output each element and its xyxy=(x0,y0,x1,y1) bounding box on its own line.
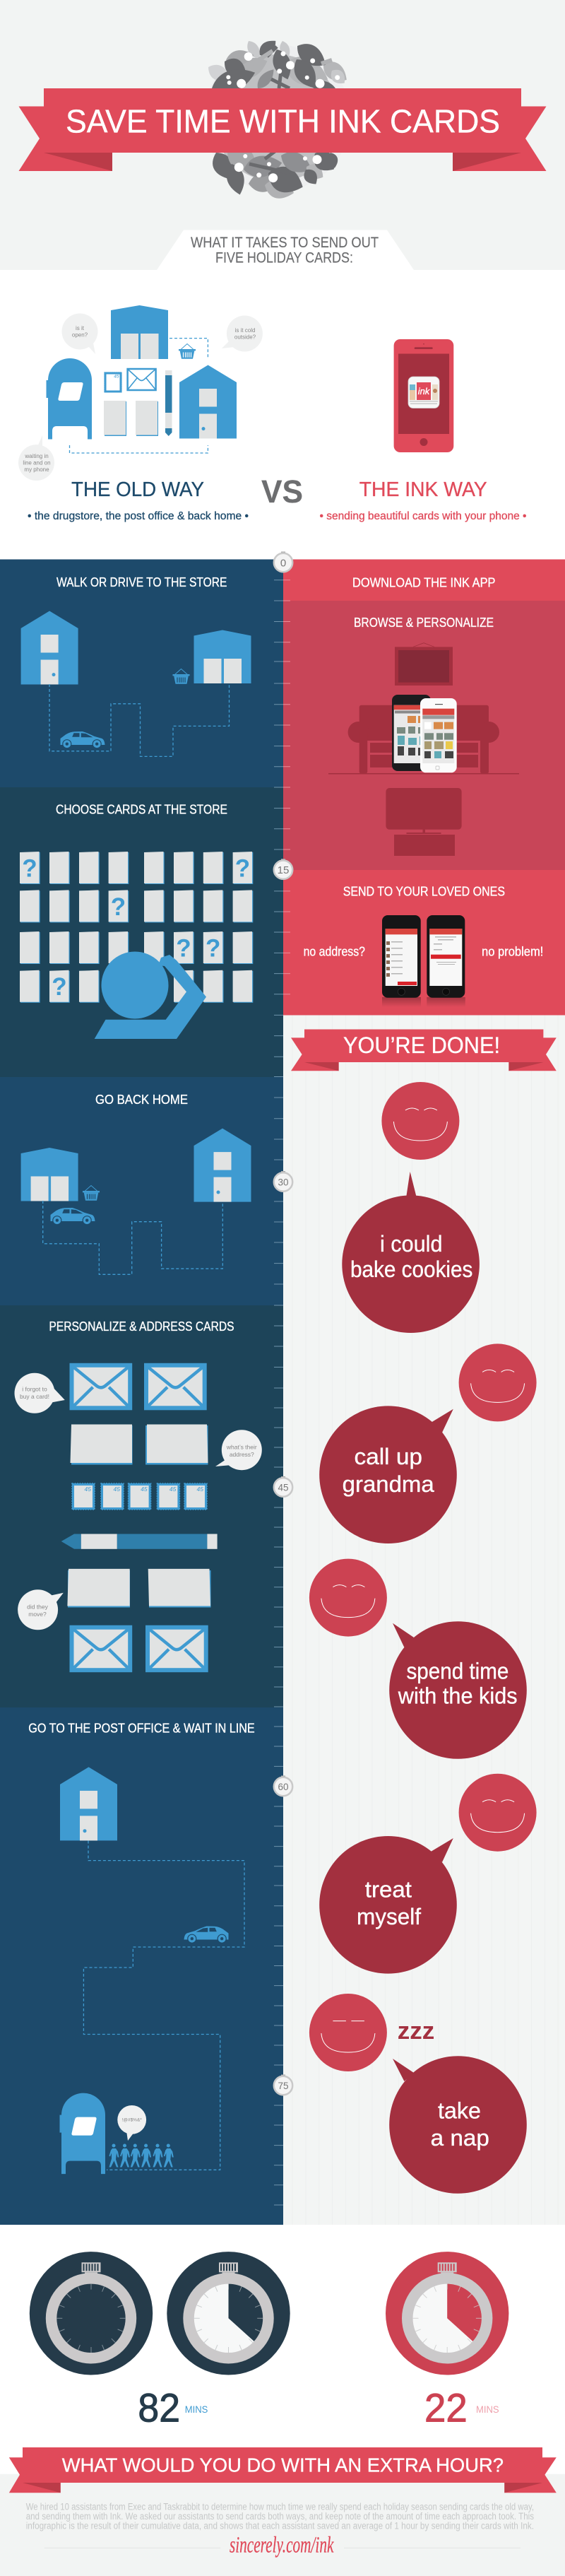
bubble: address: address? xyxy=(230,1451,254,1458)
picture frame xyxy=(395,643,453,686)
pencil xyxy=(165,370,172,436)
bubble: address xyxy=(215,1430,262,1470)
VS: VS xyxy=(261,474,303,510)
bubble: is it cold: outside? xyxy=(234,334,256,341)
timer: 75: 75 xyxy=(278,2081,289,2091)
footer url: sincerely.com/ink xyxy=(230,2533,334,2558)
heading: the old way: • the drugstore, the post office & back home • xyxy=(28,510,249,522)
stopwatch: 22 minutes dark xyxy=(167,2252,290,2375)
bubble: waiting in line: waiting in xyxy=(24,453,49,459)
old way illustration xyxy=(18,305,263,481)
bubble: waiting in line: line and on xyxy=(23,459,51,466)
extra hour ribbon: WHAT WOULD YOU DO WITH AN EXTRA HOUR? xyxy=(62,2454,504,2476)
tv xyxy=(386,788,462,856)
people queue xyxy=(109,2144,174,2167)
face and bubble: bake cookies xyxy=(342,1082,480,1333)
bubble: forgot xyxy=(14,1373,65,1413)
timer: 15: 15 xyxy=(278,864,289,876)
stopwatch: 22 minutes red xyxy=(386,2252,509,2375)
title: SAVE TIME WITH INK CARDS xyxy=(66,103,500,140)
face and bubble: take a nap: zzz xyxy=(398,2018,434,2045)
page background: top band xyxy=(0,0,565,270)
face and bubble: take a nap xyxy=(309,1994,527,2194)
face and bubble: call up grandma: call up xyxy=(355,1444,422,1469)
timer: 45 xyxy=(274,1476,292,1497)
white iphone screenshot xyxy=(420,698,457,772)
envelopes top xyxy=(69,1363,207,1410)
sofa xyxy=(328,705,519,775)
panel: go back home xyxy=(0,1077,283,1305)
face and bubble: take a nap: take xyxy=(438,2098,481,2123)
you're done ribbon xyxy=(291,1029,557,1071)
bubble: moved xyxy=(18,1589,64,1630)
envelope xyxy=(128,369,156,390)
number: 22 mins: MINS xyxy=(476,2404,499,2415)
title ribbon xyxy=(18,88,547,171)
panel: personalize and address cards xyxy=(0,1305,283,1707)
face and bubble: bake cookies: bake cookies xyxy=(350,1257,472,1282)
bubble: forgot: i forgot to xyxy=(22,1385,47,1392)
face and bubble: bake cookies: i could xyxy=(380,1231,442,1257)
timer: 15 xyxy=(274,859,292,879)
stamp: 45 xyxy=(114,375,119,379)
card grid: ? xyxy=(176,934,191,963)
heading: the old way: THE OLD WAY xyxy=(71,478,204,501)
face and bubble: treat myself xyxy=(319,1774,537,1974)
card grid xyxy=(20,852,253,1003)
heading: the old way xyxy=(28,478,249,522)
ink app icon xyxy=(408,377,439,408)
face and bubble: call up grandma: grandma xyxy=(343,1471,434,1497)
face and bubble: spend time with the kids: with the kids xyxy=(398,1683,518,1709)
number: 22 mins: 22 xyxy=(424,2386,468,2431)
panel: walk or drive to the store xyxy=(0,560,283,787)
bubble: address: what’s their xyxy=(226,1443,257,1450)
footer background xyxy=(0,2474,565,2576)
you're done ribbon: YOU’RE DONE! xyxy=(343,1033,500,1058)
route dashes xyxy=(69,339,208,453)
face and bubble: treat myself: myself xyxy=(357,1904,421,1929)
timer: 60: 60 xyxy=(278,1782,289,1792)
bubble: is it open: open? xyxy=(72,332,88,338)
number: 22 mins xyxy=(424,2386,499,2431)
bubble: swearing: !@#$%&* xyxy=(122,2117,142,2123)
pencil xyxy=(61,1534,218,1549)
heading: the ink way xyxy=(319,478,527,522)
timer: 45: 45 xyxy=(278,1483,289,1493)
face and bubble: treat myself: treat xyxy=(365,1877,412,1902)
card grid: ? xyxy=(111,893,126,921)
cards bottom xyxy=(67,1569,211,1607)
store xyxy=(111,305,168,359)
heading: browse: BROWSE & PERSONALIZE xyxy=(354,615,494,630)
number: 82 mins: 82 xyxy=(138,2386,180,2431)
panel: post office: GO TO THE POST OFFICE & WAIT IN LINE xyxy=(28,1721,255,1735)
subtitle tab: WHAT IT TAKES TO SEND OUT xyxy=(191,235,379,251)
bubble: is it open xyxy=(62,314,97,354)
panel: right steps xyxy=(283,560,565,1015)
heading: download: DOWNLOAD THE INK APP xyxy=(352,575,496,590)
face and bubble: call up grandma xyxy=(319,1343,537,1543)
panel: go back home: GO BACK HOME xyxy=(95,1092,188,1107)
card grid: ? xyxy=(22,855,37,882)
stamp xyxy=(105,372,121,392)
panel: personalize and address cards: PERSONALIZE & ADDRESS CARDS xyxy=(49,1319,234,1334)
wreath illustration xyxy=(203,36,352,202)
no address text: no address? xyxy=(304,945,365,959)
panel: choose cards at the store xyxy=(0,787,283,1077)
timer: 0: 0 xyxy=(280,557,286,570)
number: 82 mins: MINS xyxy=(185,2404,208,2415)
bubble: is it cold: is it cold xyxy=(235,327,255,334)
number: 82 mins xyxy=(138,2386,208,2431)
cards top xyxy=(71,1425,208,1464)
heading: the ink way: • sending beautiful cards with your phone • xyxy=(319,510,527,522)
card grid: ? xyxy=(206,934,220,963)
mailbox xyxy=(47,358,92,440)
house xyxy=(179,365,237,438)
bubble: waiting in line: my phone xyxy=(24,466,49,473)
bubble: moved: move? xyxy=(28,1611,47,1618)
heading: the ink way: THE INK WAY xyxy=(359,478,487,501)
extra hour ribbon xyxy=(9,2447,557,2493)
ink way phone illustration xyxy=(394,339,453,452)
timeline ticks xyxy=(274,580,290,2205)
basket xyxy=(179,343,196,359)
face and bubble: spend time with the kids xyxy=(309,1559,527,1759)
panel: choose cards at the store: CHOOSE CARDS AT THE STORE xyxy=(56,801,227,816)
panel: post office xyxy=(0,1707,283,2225)
bubble: swearing xyxy=(117,2105,146,2141)
subtitle tab xyxy=(157,230,414,270)
heading: send: SEND TO YOUR LOVED ONES xyxy=(343,884,505,899)
envelopes bottom xyxy=(69,1625,208,1672)
face and bubble: take a nap: a nap xyxy=(431,2125,489,2151)
bubble: is it open: is it xyxy=(76,325,85,331)
phone: ask address xyxy=(427,915,465,1007)
phone: recipients xyxy=(382,915,421,1007)
person scratching head xyxy=(95,951,206,1039)
face and bubble: spend time with the kids: spend time xyxy=(407,1658,509,1683)
stamps xyxy=(72,1483,207,1510)
no problem text: no problem! xyxy=(482,945,543,959)
panel: you're done background xyxy=(283,1015,565,2225)
blank cards xyxy=(104,401,158,436)
methodology text xyxy=(26,2501,534,2531)
ink app icon: ink xyxy=(418,386,431,396)
bubble: moved: did they xyxy=(27,1604,49,1611)
bubble: is it cold xyxy=(222,315,263,352)
stopwatch: full hour xyxy=(30,2252,153,2375)
bubble: waiting in line xyxy=(18,435,54,481)
timer: 30: 30 xyxy=(278,1177,289,1187)
card grid: ? xyxy=(235,855,250,882)
panel: walk or drive to the store: WALK OR DRIVE TO THE STORE xyxy=(56,575,227,589)
timer: 60 xyxy=(274,1775,292,1796)
timer: 30 xyxy=(274,1171,292,1192)
card grid: ? xyxy=(52,973,67,1001)
android phone screenshot xyxy=(392,695,431,771)
timer: 0 xyxy=(274,551,292,572)
bubble: forgot: buy a card! xyxy=(20,1393,49,1400)
timer: 75 xyxy=(274,2075,292,2095)
subtitle tab: FIVE HOLIDAY CARDS: xyxy=(215,250,353,266)
